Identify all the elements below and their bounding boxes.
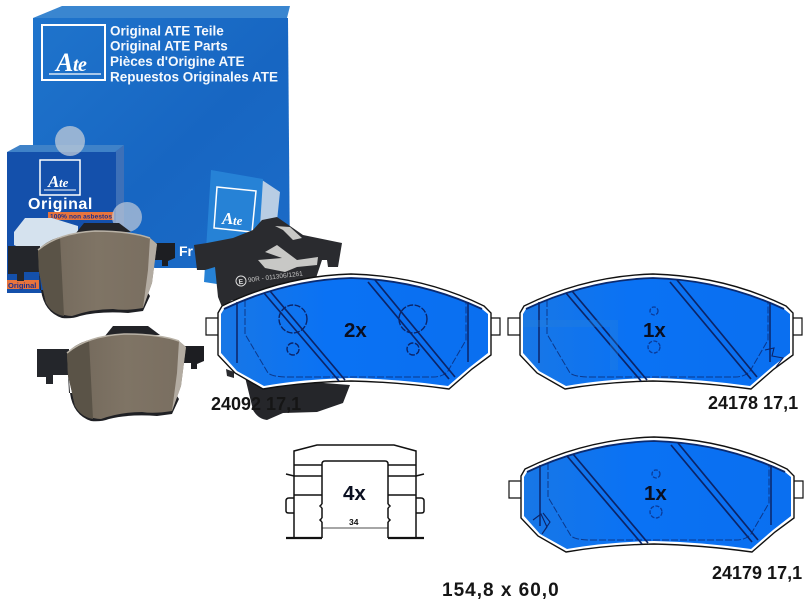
watermark two	[112, 202, 142, 232]
leaflet logo: A	[221, 209, 233, 228]
friction pad, upper	[8, 223, 175, 318]
small ATE box	[7, 145, 124, 293]
ATE logo square: te	[73, 54, 87, 76]
backing plate	[194, 217, 342, 307]
ATE logo square	[42, 25, 105, 80]
approval marking: E	[238, 279, 244, 286]
lighter bands	[523, 320, 618, 370]
box title lines: Pièces d'Origine ATE	[110, 54, 244, 69]
box title lines: Repuestos Originales ATE	[110, 70, 278, 84]
dimension: 34	[349, 517, 359, 527]
small logo: A	[47, 172, 59, 191]
blue pad 24178	[508, 274, 802, 389]
leaflet pages	[256, 180, 280, 250]
dimensions text: 154,8 x 60,0	[442, 580, 560, 601]
small box side	[115, 145, 124, 290]
part number 24178: 24178 17,1	[708, 393, 798, 413]
box top and side faces	[33, 6, 290, 18]
watermark one	[55, 126, 85, 156]
small box front	[7, 152, 116, 293]
wear sensor mark	[765, 348, 783, 367]
blue pad 24179	[509, 437, 803, 552]
ATE logo square: A	[54, 48, 73, 77]
small logo: te	[59, 175, 69, 190]
pad holes	[648, 307, 660, 353]
lower hook	[226, 369, 234, 378]
Fr label on large box: Fr	[179, 243, 194, 259]
leaflet cover	[204, 170, 263, 290]
orange footer strip: Original	[8, 281, 36, 290]
friction pad, lower	[37, 326, 204, 421]
box title lines	[110, 24, 278, 84]
pad body	[508, 274, 802, 389]
non asbestos strip: 100% non asbestos	[50, 214, 112, 220]
quantity: 1x	[643, 319, 666, 342]
part number 24179: 24179 17,1	[712, 563, 802, 583]
quantity: 1x	[644, 482, 667, 505]
approval marking	[235, 268, 304, 287]
box title lines: Original ATE Teile	[110, 24, 224, 38]
leaflet	[204, 170, 280, 290]
lower part of plate	[245, 377, 350, 420]
watermarks	[55, 126, 142, 232]
box title lines: Original ATE Parts	[110, 38, 228, 54]
leaflet logo	[214, 187, 256, 232]
leaflet logo: te	[233, 213, 243, 228]
blue pad 24092	[206, 274, 500, 389]
box front face	[33, 18, 290, 268]
small box top	[7, 145, 124, 152]
wear sensor mark	[533, 513, 550, 534]
small logo	[40, 160, 80, 195]
clip drawing	[286, 445, 424, 538]
pad holes	[650, 470, 662, 518]
pad body	[509, 437, 803, 552]
quantity: 4x	[343, 482, 366, 505]
metal clip	[258, 226, 318, 272]
dark backing pad, rear view	[194, 217, 350, 420]
bolt circles	[279, 305, 427, 355]
large ATE box	[33, 6, 290, 268]
quantity: 2x	[344, 319, 367, 342]
illustration of pad	[14, 218, 78, 250]
part number 24092: 24092 17,1	[211, 394, 301, 414]
Original heading: Original	[28, 196, 93, 213]
approval marking: 90R - 011306/1261	[248, 270, 304, 284]
pad body	[206, 274, 500, 389]
